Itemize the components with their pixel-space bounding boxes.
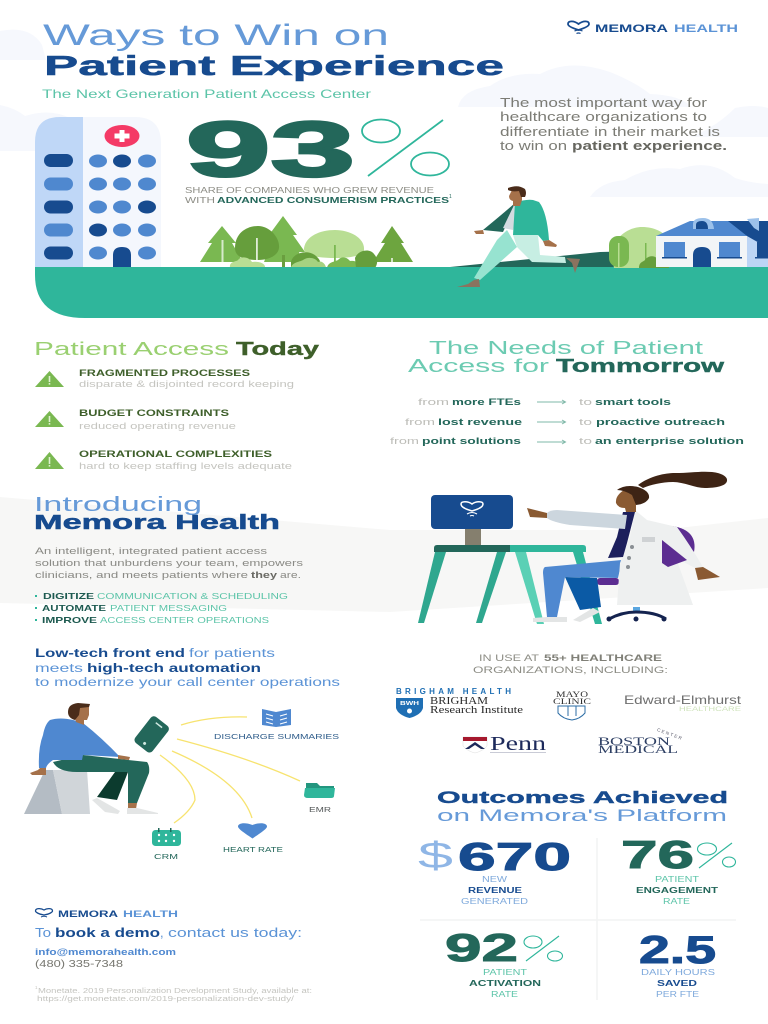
intro text bbox=[500, 96, 727, 153]
list: from and to: lost revenue bbox=[438, 417, 522, 428]
intro text: differentiate in their market is bbox=[500, 125, 720, 139]
list: digitize automate improve: AUTOMATE bbox=[42, 603, 106, 613]
logo: Memora Health bottom: HEALTH bbox=[123, 909, 178, 919]
heading: in use at: ORGANIZATIONS, INCLUDING: bbox=[473, 665, 668, 675]
illustration: seated patient bbox=[24, 703, 158, 814]
heading: in use at: 55+ HEALTHCARE bbox=[544, 653, 662, 663]
heading: needs of tomorrow: Tommorrow bbox=[556, 356, 726, 376]
icon: heart rate bbox=[223, 823, 283, 854]
logo: Penn bbox=[463, 733, 546, 755]
list: from and to: to bbox=[579, 397, 592, 408]
intro text: The most important way for bbox=[500, 96, 707, 110]
footnote: Monetate. 2019 Personalization Development Study, available at: bbox=[38, 988, 312, 995]
illustration: desk and monitor bbox=[418, 495, 602, 624]
logo: Memora Health top: MEMORA bbox=[595, 23, 668, 35]
logo: Edward-Elmhurst bbox=[624, 693, 742, 713]
stat: 76%: RATE bbox=[663, 897, 690, 906]
list: digitize automate improve: PATIENT MESSAGING bbox=[110, 603, 227, 613]
intro text: to win on bbox=[500, 139, 567, 153]
stat caption: WITH bbox=[185, 196, 215, 205]
stat: 92%: PATIENT bbox=[483, 968, 527, 977]
list: from and to: from bbox=[418, 397, 449, 408]
logo: Mayo Clinic: CLINIC bbox=[553, 696, 591, 706]
icon: EMR folder bbox=[304, 783, 335, 814]
logo: Mayo Clinic: MAYO bbox=[556, 689, 588, 699]
illustration: seated doctor bbox=[527, 472, 727, 622]
list: today's problems bbox=[35, 368, 294, 472]
list: digitize automate improve: IMPROVE bbox=[42, 615, 97, 625]
item: operational complexities bbox=[35, 449, 292, 472]
stat: $670 bbox=[418, 835, 571, 906]
icon: phone bbox=[133, 715, 171, 754]
heading: introducing memora health bbox=[34, 493, 280, 534]
footnote: 1 bbox=[35, 985, 38, 990]
logo: Brigham Health: BRIGHAM HEALTH bbox=[396, 687, 511, 696]
logo: Penn: Penn bbox=[490, 733, 546, 755]
heading: low-tech meets high-tech: for patients bbox=[189, 646, 275, 660]
heading: patient access today: Patient Access bbox=[34, 338, 229, 359]
item: operational complexities: OPERATIONAL COMPLEXITIES bbox=[79, 449, 272, 459]
footnote bbox=[35, 985, 312, 1003]
stat: 76%: PATIENT bbox=[655, 875, 699, 884]
stat: 2.5 hours: DAILY HOURS bbox=[641, 968, 715, 977]
logo: Edward-Elmhurst: HEALTHCARE bbox=[679, 707, 741, 713]
stat: 76%: ENGAGEMENT bbox=[636, 886, 718, 895]
paragraph: solution description: An intelligent, integrated patient access bbox=[35, 546, 267, 557]
stat: 92%: RATE bbox=[491, 990, 518, 999]
logo: Boston Medical Center bbox=[598, 727, 683, 756]
stat: 2.5 hours: 2.5 bbox=[639, 929, 716, 972]
icon: CRM calendar bbox=[152, 828, 181, 861]
paragraph: solution description: clinicians, and meets patients where bbox=[35, 570, 248, 581]
heading: low-tech meets high-tech bbox=[35, 646, 340, 689]
logo: Memora Health bottom bbox=[36, 909, 178, 919]
call to action: contact us today: bbox=[168, 925, 302, 940]
logo: Memora Health top: HEALTH bbox=[674, 23, 738, 35]
heading: needs of tomorrow bbox=[408, 338, 726, 376]
heading: outcomes achieved: on Memora's Platform bbox=[437, 806, 727, 825]
logo: Memora Health bottom: MEMORA bbox=[58, 909, 119, 919]
list: from and to: more FTEs bbox=[452, 397, 521, 408]
logo: Mayo Clinic bbox=[553, 689, 591, 720]
stat: $670: REVENUE bbox=[468, 886, 523, 895]
list: digitize automate improve: DIGITIZE bbox=[43, 591, 94, 601]
stat: 2.5 hours: PER FTE bbox=[656, 990, 699, 999]
stat: $670: GENERATED bbox=[461, 897, 528, 906]
list: from and to: from bbox=[390, 436, 419, 447]
logo: Boston Medical Center: MEDICAL bbox=[598, 742, 678, 756]
illustration: connector lines bbox=[160, 717, 300, 823]
stat caption bbox=[185, 186, 452, 205]
heading: needs of tomorrow: Access for bbox=[408, 356, 549, 376]
illustration: trees bbox=[200, 216, 413, 268]
stat: 93 percent: 93 bbox=[186, 105, 355, 193]
stat: $670: $ bbox=[418, 835, 453, 876]
list: from and to: smart tools bbox=[595, 397, 671, 408]
list: digitize automate improve: ACCESS CENTER OPERATIONS bbox=[100, 615, 269, 625]
item: operational complexities: hard to keep staffing levels adequate bbox=[79, 461, 292, 472]
heading: introducing memora health: Introducing bbox=[34, 493, 202, 516]
list: digitize automate improve bbox=[35, 591, 288, 625]
item: budget constraints: BUDGET CONSTRAINTS bbox=[79, 408, 229, 418]
logo: Boston Medical Center: CENTER bbox=[656, 727, 683, 741]
stat: 92%: 92 bbox=[445, 927, 518, 970]
icon: heart rate: HEART RATE bbox=[223, 845, 283, 854]
illustration: dark hill bbox=[440, 250, 680, 268]
footnote: https://get.monetate.com/2019-personalization-dev-study/ bbox=[37, 996, 294, 1003]
list: from and to: an enterprise solution bbox=[595, 436, 744, 447]
illustration: walking person bbox=[457, 186, 580, 287]
intro text: healthcare organizations to bbox=[500, 110, 707, 124]
stat caption: 1 bbox=[449, 194, 452, 200]
background clouds bbox=[0, 30, 768, 197]
logo: Brigham Health: BWH bbox=[400, 701, 420, 707]
paragraph: solution description bbox=[35, 546, 303, 581]
logo: Memora Health top bbox=[568, 21, 738, 35]
paragraph: solution description: they bbox=[251, 570, 278, 581]
list: from and to: point solutions bbox=[422, 436, 521, 447]
list: from and to: to bbox=[579, 436, 592, 447]
title: Patient Experience bbox=[44, 50, 504, 81]
stat: 2.5 hours: SAVED bbox=[657, 979, 697, 988]
call to action: book a demo bbox=[55, 925, 160, 940]
heading: low-tech meets high-tech: high-tech automation bbox=[87, 661, 261, 675]
icon: discharge summaries: DISCHARGE SUMMARIES bbox=[214, 732, 339, 741]
heading: introducing memora health: Memora Health bbox=[34, 512, 280, 534]
list: from and to: from bbox=[405, 417, 435, 428]
call to action: To bbox=[35, 925, 51, 940]
stat: 92%: ACTIVATION bbox=[469, 979, 541, 988]
item: fragmented processes bbox=[35, 368, 294, 390]
subtitle: The Next Generation Patient Access Center bbox=[42, 87, 371, 101]
heading: low-tech meets high-tech: meets bbox=[35, 661, 83, 675]
stat: $670: 670 bbox=[458, 836, 571, 879]
contact details bbox=[35, 947, 176, 970]
illustration: house bbox=[656, 218, 768, 267]
stat: 2.5 hours bbox=[639, 929, 716, 999]
stat: 92% bbox=[445, 927, 562, 999]
heading: needs of tomorrow: The Needs of Patient bbox=[429, 338, 703, 358]
title: Ways to Win on bbox=[43, 19, 389, 52]
heading: outcomes achieved: Outcomes Achieved bbox=[437, 788, 728, 807]
logo: Brigham Health bbox=[396, 687, 524, 718]
heading: patient access today: Today bbox=[236, 338, 320, 359]
intro text: patient experience. bbox=[572, 139, 727, 153]
title bbox=[43, 19, 504, 81]
item: budget constraints bbox=[35, 408, 236, 432]
contact details: (480) 335-7348 bbox=[35, 959, 124, 970]
stat: 93 percent bbox=[186, 105, 449, 193]
stat caption: ADVANCED CONSUMERISM PRACTICES bbox=[217, 196, 450, 205]
list: from and to: proactive outreach bbox=[596, 417, 725, 428]
grey band background bbox=[0, 497, 768, 612]
logo: Boston Medical Center: BOSTON bbox=[598, 734, 670, 748]
outcome dividers bbox=[420, 838, 736, 1000]
stat: 76% bbox=[621, 834, 736, 906]
logo: Edward-Elmhurst: Edward-Elmhurst bbox=[624, 693, 742, 707]
list: digitize automate improve: COMMUNICATION & SCHEDULING bbox=[97, 591, 288, 601]
illustration: ground bbox=[35, 267, 768, 318]
icon: CRM calendar: CRM bbox=[154, 852, 178, 861]
paragraph: solution description: are. bbox=[280, 570, 301, 581]
paragraph: solution description: solution that unburdens your team, empowers bbox=[35, 558, 303, 569]
item: budget constraints: reduced operating revenue bbox=[79, 421, 236, 432]
stat: $670: NEW bbox=[482, 875, 508, 884]
list: from and to: to bbox=[579, 417, 592, 428]
logo: Brigham Health: Research Institute bbox=[430, 705, 524, 716]
call to action bbox=[35, 925, 302, 940]
logo: Brigham Health: BRIGHAM bbox=[430, 696, 488, 707]
icon: EMR folder: EMR bbox=[309, 805, 332, 814]
heading: in use at: IN USE AT bbox=[479, 653, 540, 663]
stat: 76%: 76 bbox=[621, 834, 694, 877]
heading: in use at bbox=[473, 653, 668, 675]
heading: patient access today bbox=[34, 338, 320, 359]
heading: low-tech meets high-tech: Low-tech front end bbox=[35, 646, 185, 660]
illustration: hospital bbox=[35, 117, 161, 268]
item: fragmented processes: disparate & disjointed record keeping bbox=[79, 379, 294, 390]
heading: low-tech meets high-tech: to modernize your call center operations bbox=[35, 675, 340, 689]
icon: discharge summaries bbox=[214, 709, 339, 741]
stat caption: SHARE OF COMPANIES WHO GREW REVENUE bbox=[185, 186, 435, 195]
contact details: info@memorahealth.com bbox=[35, 947, 176, 957]
heading: outcomes achieved bbox=[437, 788, 728, 825]
list: from and to bbox=[390, 397, 744, 447]
illustration: right trees bbox=[609, 227, 669, 268]
call to action: , bbox=[160, 925, 164, 940]
item: fragmented processes: FRAGMENTED PROCESSES bbox=[79, 368, 250, 378]
